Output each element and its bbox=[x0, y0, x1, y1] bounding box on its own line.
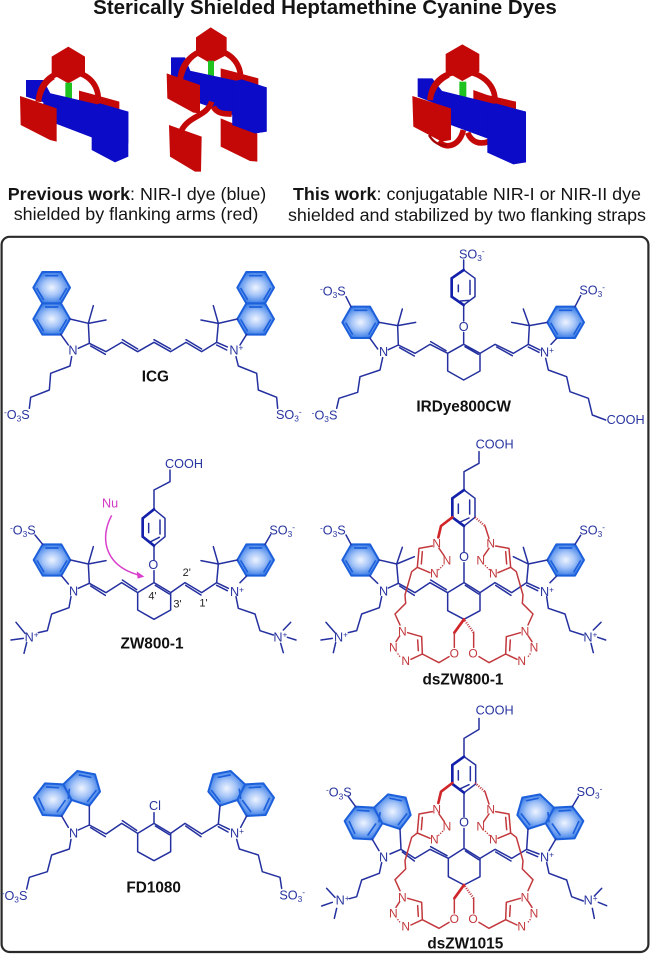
molecule: IRDye800CW: N bbox=[379, 345, 388, 359]
red straps with triazoles: N bbox=[486, 802, 495, 816]
molecule: ZW800-1: S bbox=[27, 523, 36, 537]
molecule: dsZW1015: - bbox=[600, 784, 603, 794]
molecule: ICG: + bbox=[238, 343, 243, 353]
molecule: dsZW800-1: N bbox=[379, 584, 388, 598]
molecule: FD1080: N bbox=[69, 827, 78, 841]
molecule: FD1080: 3 bbox=[298, 894, 303, 904]
molecule: dsZW1015: O bbox=[459, 815, 469, 829]
molecule: FD1080: - bbox=[2, 888, 5, 898]
panel: dye structures frame bbox=[2, 237, 648, 952]
molecule: dsZW1015: SO bbox=[577, 785, 595, 799]
molecule: dsZW1015: + bbox=[593, 893, 598, 903]
molecule: dsZW1015: + bbox=[549, 850, 554, 860]
molecule: ICG bbox=[4, 272, 302, 424]
molecule: IRDye800CW: 3 bbox=[598, 289, 603, 299]
red straps with triazoles: N bbox=[476, 554, 485, 568]
molecule: dsZW1015: 3 bbox=[595, 791, 600, 801]
red straps with triazoles: N bbox=[530, 641, 538, 655]
molecule: ICG: N bbox=[229, 343, 238, 357]
molecule: IRDye800CW: O bbox=[314, 408, 324, 422]
molecule: ICG: SO bbox=[276, 408, 294, 422]
molecule: ICG: - bbox=[4, 407, 7, 417]
molecule: ZW800-1: + bbox=[34, 630, 39, 640]
molecule: dsZW1015: O bbox=[329, 786, 339, 800]
label: ICG: ICG bbox=[142, 369, 169, 386]
molecule: ZW800-1: N bbox=[69, 584, 78, 598]
nucleophile arrow: Nu bbox=[102, 497, 118, 511]
label: IRDye800CW: IRDye800CW bbox=[416, 399, 511, 416]
red straps with triazoles: N bbox=[443, 554, 451, 568]
molecule: dsZW800-1: N bbox=[334, 630, 343, 644]
molecule: ZW800-1: 3 bbox=[23, 529, 28, 539]
molecule: ICG: 3 bbox=[294, 414, 299, 424]
molecule: IRDye800CW: SO bbox=[459, 247, 477, 261]
red straps with triazoles: N bbox=[486, 537, 495, 551]
molecule: dsZW1015 bbox=[322, 703, 607, 953]
molecule: ICG: - bbox=[299, 407, 302, 417]
molecule: dsZW1015: + bbox=[345, 893, 350, 903]
molecule: dsZW800-1 bbox=[320, 438, 606, 688]
red straps with triazoles: N bbox=[521, 890, 529, 904]
molecule: dsZW1015: N bbox=[379, 850, 388, 864]
caption: this work: This work: conjugatable NIR-I or NIR-II dye bbox=[293, 184, 641, 204]
molecule: dsZW800-1: O bbox=[323, 523, 333, 537]
red straps with triazoles: N bbox=[489, 567, 498, 581]
molecule: dsZW800-1: S bbox=[337, 523, 346, 537]
red straps with triazoles: N bbox=[517, 654, 526, 668]
molecule: dsZW800-1: COOH bbox=[476, 438, 514, 452]
red straps with triazoles: N bbox=[430, 567, 439, 581]
molecule: ICG: 3 bbox=[17, 414, 22, 424]
molecule: ZW800-1: COOH bbox=[165, 457, 203, 471]
caption: previous work bbox=[8, 184, 266, 224]
molecule: IRDye800CW: - bbox=[482, 246, 485, 256]
caption: previous work: shielded by flanking arms (red) bbox=[14, 204, 258, 224]
molecule: IRDye800CW: - bbox=[320, 283, 323, 293]
position numbers: 2' bbox=[183, 567, 191, 579]
molecule: dsZW800-1: + bbox=[343, 630, 348, 640]
red straps with triazoles: N bbox=[443, 819, 451, 833]
molecule: IRDye800CW: - bbox=[602, 282, 605, 292]
molecule: ICG: O bbox=[7, 408, 17, 422]
molecule: IRDye800CW: N bbox=[540, 346, 549, 360]
caption: this work: shielded and stabilized by two flanking straps bbox=[288, 205, 646, 225]
red straps with triazoles bbox=[389, 783, 538, 934]
molecule: ZW800-1: N bbox=[273, 630, 282, 644]
molecule: ZW800-1: O bbox=[13, 523, 23, 537]
molecule: IRDye800CW: S bbox=[329, 408, 337, 422]
red straps with triazoles bbox=[389, 517, 538, 668]
molecule: FD1080: S bbox=[19, 889, 27, 903]
red straps with triazoles: N bbox=[489, 832, 498, 846]
icon: previous work open arms bbox=[167, 27, 267, 172]
label: dsZW800-1: dsZW800-1 bbox=[423, 671, 504, 688]
molecule: ZW800-1: + bbox=[239, 584, 244, 594]
molecule: ICG: N bbox=[68, 343, 77, 357]
molecule: dsZW800-1: N bbox=[540, 585, 549, 599]
molecule: FD1080: Cl bbox=[149, 799, 161, 813]
molecule: IRDye800CW: 3 bbox=[333, 290, 338, 300]
molecule: dsZW800-1: N bbox=[583, 630, 592, 644]
red straps with triazoles: N bbox=[401, 654, 410, 668]
molecule: IRDye800CW: - bbox=[312, 407, 315, 417]
molecule: IRDye800CW: COOH bbox=[607, 413, 645, 427]
molecule: ZW800-1: + bbox=[282, 630, 287, 640]
molecule: dsZW1015: N bbox=[584, 894, 593, 908]
molecule: IRDye800CW: S bbox=[337, 284, 346, 298]
red straps with triazoles: N bbox=[476, 819, 485, 833]
molecule: dsZW800-1: + bbox=[592, 630, 597, 640]
molecule: FD1080: 3 bbox=[14, 895, 19, 905]
molecule: ZW800-1: O bbox=[148, 558, 158, 572]
molecule: FD1080: - bbox=[302, 887, 305, 897]
red straps with triazoles: N bbox=[517, 920, 526, 934]
red straps with triazoles: N bbox=[430, 832, 439, 846]
molecule: FD1080: N bbox=[230, 827, 239, 841]
red straps with triazoles: N bbox=[398, 625, 407, 639]
molecule: dsZW1015: 3 bbox=[339, 791, 344, 801]
molecule: dsZW1015: S bbox=[343, 786, 352, 800]
molecule: ZW800-1: SO bbox=[269, 523, 288, 537]
icon: previous work closed arms bbox=[20, 47, 128, 162]
icon: this work strapped dye bbox=[412, 44, 526, 164]
molecule: dsZW800-1: - bbox=[320, 522, 323, 532]
position numbers: 1' bbox=[199, 598, 208, 610]
red straps with triazoles: N bbox=[432, 537, 441, 551]
molecule: IRDye800CW: SO bbox=[579, 283, 598, 297]
molecule: ZW800-1 bbox=[10, 457, 296, 653]
molecule: IRDye800CW: O bbox=[323, 284, 333, 298]
nucleophile arrow bbox=[102, 497, 144, 579]
molecule: ZW800-1: - bbox=[10, 522, 13, 532]
caption: this work bbox=[288, 184, 646, 225]
red straps with triazoles: N bbox=[530, 906, 538, 920]
molecule: ZW800-1: N bbox=[25, 630, 34, 644]
molecule: ZW800-1: 3 bbox=[288, 529, 293, 539]
red straps with triazoles: O bbox=[468, 646, 478, 660]
red straps with triazoles: O bbox=[468, 912, 478, 926]
molecule: dsZW800-1: 3 bbox=[598, 529, 603, 539]
molecule: FD1080: + bbox=[239, 826, 244, 836]
molecule: FD1080 bbox=[2, 771, 305, 905]
molecule: IRDye800CW: 3 bbox=[324, 414, 329, 424]
label: FD1080: FD1080 bbox=[126, 880, 181, 897]
molecule: IRDye800CW: 3 bbox=[477, 253, 482, 263]
molecule: ZW800-1: N bbox=[230, 585, 239, 599]
molecule: IRDye800CW: O bbox=[459, 320, 469, 334]
position numbers bbox=[148, 567, 208, 610]
red straps with triazoles: O bbox=[450, 912, 459, 926]
molecule: dsZW1015: N bbox=[540, 850, 549, 864]
label: ZW800-1: ZW800-1 bbox=[120, 635, 184, 652]
position numbers: 4' bbox=[148, 590, 157, 602]
molecule: dsZW800-1: O bbox=[459, 550, 469, 564]
molecule: ICG: S bbox=[21, 408, 30, 422]
label: dsZW1015: dsZW1015 bbox=[427, 936, 504, 953]
red straps with triazoles: N bbox=[389, 906, 398, 920]
molecule: dsZW800-1: + bbox=[549, 584, 554, 594]
molecule: dsZW1015: N bbox=[336, 894, 345, 908]
molecule: IRDye800CW bbox=[312, 246, 645, 427]
molecule: dsZW800-1: 3 bbox=[333, 529, 338, 539]
molecule: ZW800-1: - bbox=[292, 522, 295, 532]
molecule: dsZW800-1: SO bbox=[579, 523, 598, 537]
red straps with triazoles: N bbox=[521, 625, 529, 639]
molecule: dsZW800-1: - bbox=[602, 522, 605, 532]
position numbers: 3' bbox=[173, 598, 182, 610]
molecule: FD1080: O bbox=[4, 889, 14, 903]
red straps with triazoles: N bbox=[401, 920, 410, 934]
red straps with triazoles: O bbox=[450, 646, 459, 660]
red straps with triazoles: N bbox=[398, 890, 407, 904]
molecule: dsZW1015: - bbox=[326, 785, 329, 795]
molecule: FD1080: SO bbox=[279, 888, 298, 902]
caption: previous work: Previous work: NIR-I dye (blue) bbox=[8, 184, 266, 204]
red straps with triazoles: N bbox=[432, 802, 441, 816]
red straps with triazoles: N bbox=[389, 641, 398, 655]
molecule: IRDye800CW: + bbox=[549, 345, 554, 355]
molecule: dsZW1015: COOH bbox=[476, 703, 514, 717]
